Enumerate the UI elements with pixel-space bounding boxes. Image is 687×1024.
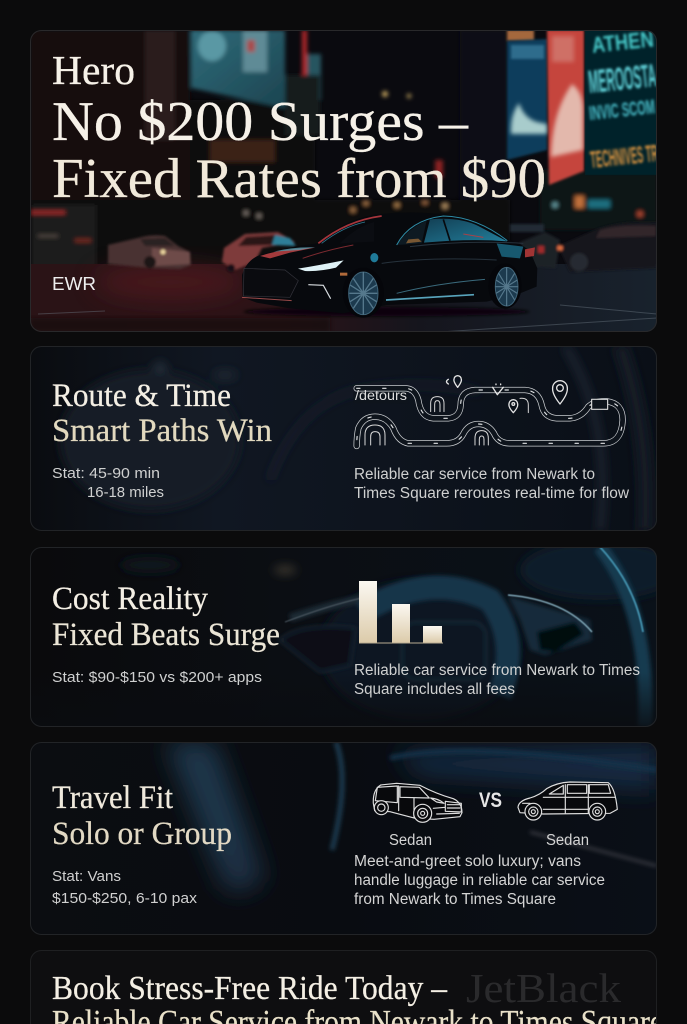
panel background: dashboard <box>60 346 646 531</box>
wheel: rear <box>492 266 521 308</box>
stat <box>52 467 164 497</box>
heading: Solo or Group <box>52 816 232 852</box>
heading: Fixed Beats Surge <box>52 617 280 653</box>
travel description <box>354 853 605 908</box>
panel: call to action <box>52 973 656 1024</box>
vehicle labels <box>390 834 588 845</box>
cta heading: Book Stress-Free Ride Today – <box>52 970 448 1007</box>
route description <box>354 466 630 502</box>
panel: travel fit <box>30 742 657 935</box>
hero title: No $200 Surges – <box>52 91 469 153</box>
icon: right vehicle outline <box>518 782 617 820</box>
panel background: steering wheel <box>125 548 656 722</box>
hero background: night street scene <box>30 27 659 332</box>
route diagram <box>353 376 623 446</box>
stat: Stat: Vans <box>52 868 121 885</box>
stat: Stat: $90-$150 vs $200+ apps <box>52 669 262 686</box>
route description: Reliable car service from Newark to <box>354 466 595 483</box>
background cars <box>108 222 657 272</box>
heading: Smart Paths Win <box>52 413 272 449</box>
travel description: Meet-and-greet solo luxury; vans <box>354 853 581 870</box>
panel background: dashboard <box>165 742 657 892</box>
heading <box>52 780 232 852</box>
vehicle labels: Sedan <box>546 832 589 849</box>
heading: Travel Fit <box>52 780 173 816</box>
road <box>30 264 657 332</box>
panel: hero <box>30 27 659 332</box>
stat <box>52 871 197 906</box>
stat: 16-18 miles <box>87 484 164 501</box>
panel: cost reality <box>52 547 657 727</box>
brand watermark: JetBlack <box>466 965 622 1011</box>
hero title: Hero <box>52 47 135 93</box>
wheel: front <box>348 272 380 318</box>
route description: Times Square reroutes real-time for flow <box>354 485 630 502</box>
car: black sedan <box>242 212 537 318</box>
travel description: from Newark to Times Square <box>354 891 556 908</box>
heading: Cost Reality <box>52 581 208 617</box>
icon: map pins <box>446 376 567 413</box>
travel description: handle luggage in reliable car service <box>354 872 605 889</box>
heading: Route & Time <box>52 378 231 414</box>
hero label: EWR: EWR <box>52 274 96 294</box>
cost description <box>354 662 640 698</box>
heading <box>52 384 272 442</box>
icon: left vehicle outline <box>373 783 462 822</box>
panel: route and time <box>30 346 657 531</box>
cost description: Square includes all fees <box>354 681 515 698</box>
stat: Stat: 45-90 min <box>52 465 160 482</box>
billboards: ATHEN <box>591 27 655 58</box>
vs label: VS <box>479 789 502 812</box>
cost description: Reliable car service from Newark to Times <box>354 662 640 679</box>
stat: $150-$250, 6-10 pax <box>52 890 198 907</box>
hero title <box>53 56 544 202</box>
vehicle labels: Sedan <box>389 832 432 849</box>
heading <box>52 581 280 653</box>
route label: /detours <box>355 388 407 403</box>
bar chart <box>359 581 443 643</box>
billboards <box>507 27 659 185</box>
hero title: Fixed Rates from $90 <box>52 148 546 210</box>
